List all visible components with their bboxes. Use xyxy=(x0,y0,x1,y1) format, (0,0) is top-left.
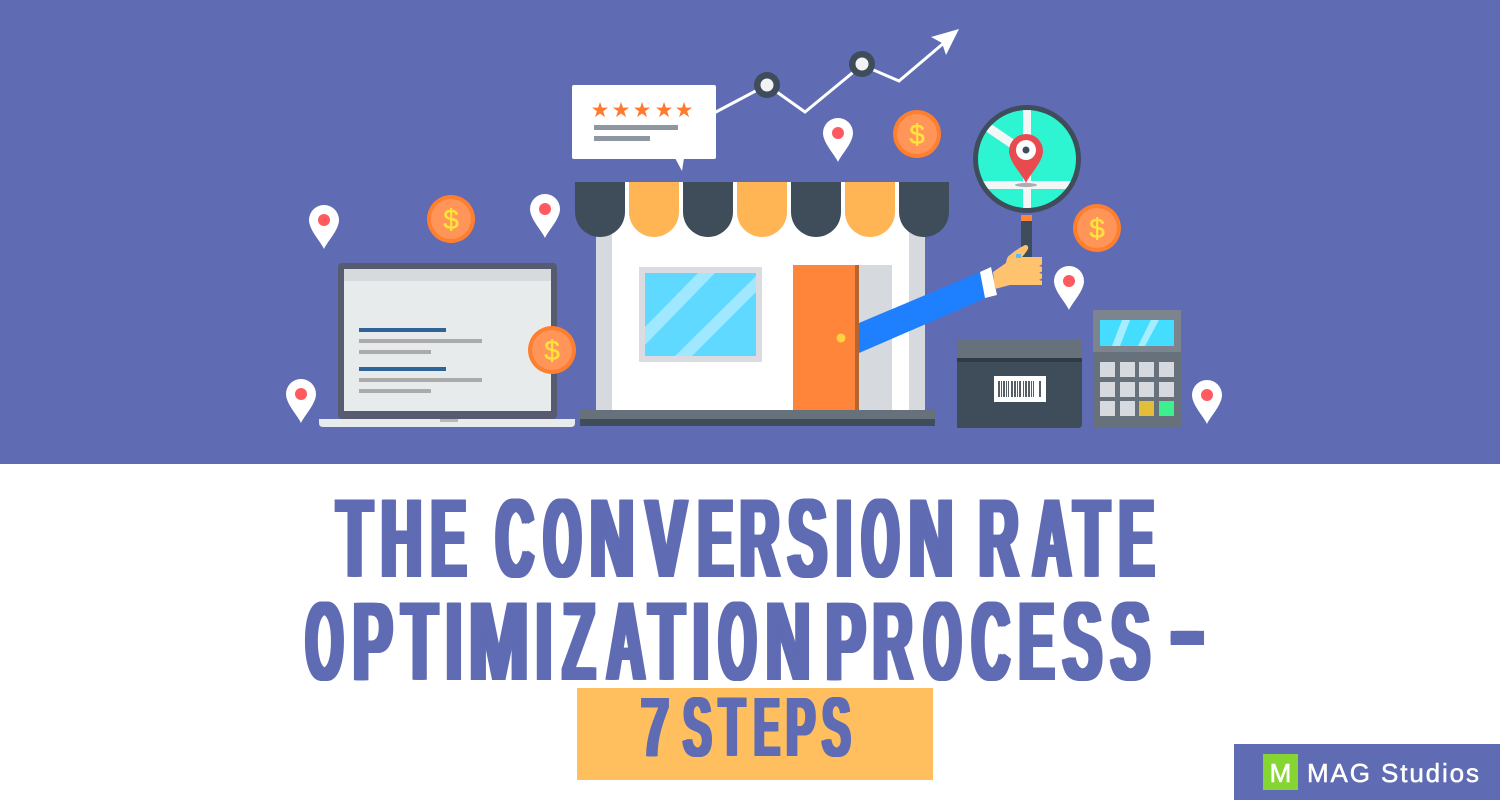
title: O xyxy=(719,579,756,704)
icon: dollar coin above awning xyxy=(893,110,941,158)
subtitle badge: 7 steps: S xyxy=(822,680,850,774)
title: V xyxy=(646,476,686,601)
review speech bubble: ★ xyxy=(633,99,651,122)
icon: location pin 6 xyxy=(1192,380,1222,424)
title: S xyxy=(1111,579,1150,704)
icon: location pin 4 xyxy=(823,118,853,162)
icon: dollar coin right xyxy=(1073,204,1121,252)
title: A xyxy=(607,579,645,704)
title: T xyxy=(337,476,372,601)
subtitle badge: 7 steps: E xyxy=(754,680,780,774)
subtitle badge: 7 steps: T xyxy=(719,680,745,774)
title: R xyxy=(740,476,780,601)
review speech bubble: ★ xyxy=(591,99,609,122)
title: T xyxy=(649,579,684,704)
title: H xyxy=(381,476,422,601)
title: O xyxy=(862,476,899,601)
shipping box with barcode xyxy=(957,339,1082,428)
icon: dollar coin top left xyxy=(427,195,475,243)
title: C xyxy=(496,476,533,601)
magnifying glass with map pin xyxy=(973,105,1081,259)
title: N xyxy=(909,476,953,601)
title: E xyxy=(1119,476,1154,601)
title: T xyxy=(1074,476,1109,601)
title: A xyxy=(1033,476,1071,601)
title: I xyxy=(693,579,709,704)
door xyxy=(793,265,892,410)
title: R xyxy=(979,476,1019,601)
title: Z xyxy=(562,579,594,704)
title: I xyxy=(446,579,462,704)
subtitle badge: 7 steps: 7 xyxy=(641,680,669,774)
subtitle badge: 7 steps: S xyxy=(682,680,711,774)
title: O xyxy=(924,579,961,704)
icon: location pin 1 xyxy=(309,205,339,249)
review speech bubble xyxy=(572,85,716,171)
title: P xyxy=(353,579,392,704)
growth chart arrow xyxy=(714,29,959,113)
title: S xyxy=(1063,579,1102,704)
icon: location pin 5 xyxy=(1054,266,1084,310)
title: N xyxy=(590,476,634,601)
icon: location pin 2 xyxy=(530,194,560,238)
logo badge: MAG Studios xyxy=(1234,744,1500,800)
arm and hand xyxy=(859,245,1043,353)
review speech bubble: ★ xyxy=(655,99,673,122)
calculator xyxy=(1093,310,1181,428)
title xyxy=(304,476,1204,704)
title: C xyxy=(972,579,1009,704)
title: R xyxy=(873,579,913,704)
icon: dollar coin top left: $ xyxy=(443,204,459,235)
icon: location pin 3 xyxy=(286,379,316,423)
subtitle badge: 7 steps xyxy=(577,688,933,780)
review speech bubble: ★ xyxy=(675,99,693,122)
title: E xyxy=(430,476,466,601)
panel: hero illustration xyxy=(0,0,1500,464)
title: P xyxy=(826,579,865,704)
store base xyxy=(580,410,935,426)
icon: dollar coin above awning: $ xyxy=(909,119,925,150)
title: M xyxy=(469,579,529,704)
title: I xyxy=(536,579,552,704)
title: O xyxy=(306,579,343,704)
title: – xyxy=(1172,567,1203,692)
review speech bubble: ★ xyxy=(612,99,630,122)
title: N xyxy=(766,579,810,704)
subtitle badge: 7 steps: P xyxy=(786,680,815,774)
icon: dollar coin on laptop: $ xyxy=(544,335,560,366)
title: S xyxy=(788,476,826,601)
icon: dollar coin right: $ xyxy=(1089,213,1105,244)
laptop xyxy=(319,263,575,427)
icon: dollar coin on laptop xyxy=(528,326,576,374)
storefront xyxy=(575,182,949,426)
striped awning xyxy=(575,182,949,237)
title: O xyxy=(544,476,581,601)
title: E xyxy=(1018,579,1054,704)
logo badge: MAG Studios: MAG Studios xyxy=(1307,758,1479,788)
shop window xyxy=(639,267,762,362)
title: E xyxy=(698,476,733,601)
title: T xyxy=(402,579,437,704)
logo badge: MAG Studios: M xyxy=(1270,758,1291,788)
title: I xyxy=(836,476,852,601)
